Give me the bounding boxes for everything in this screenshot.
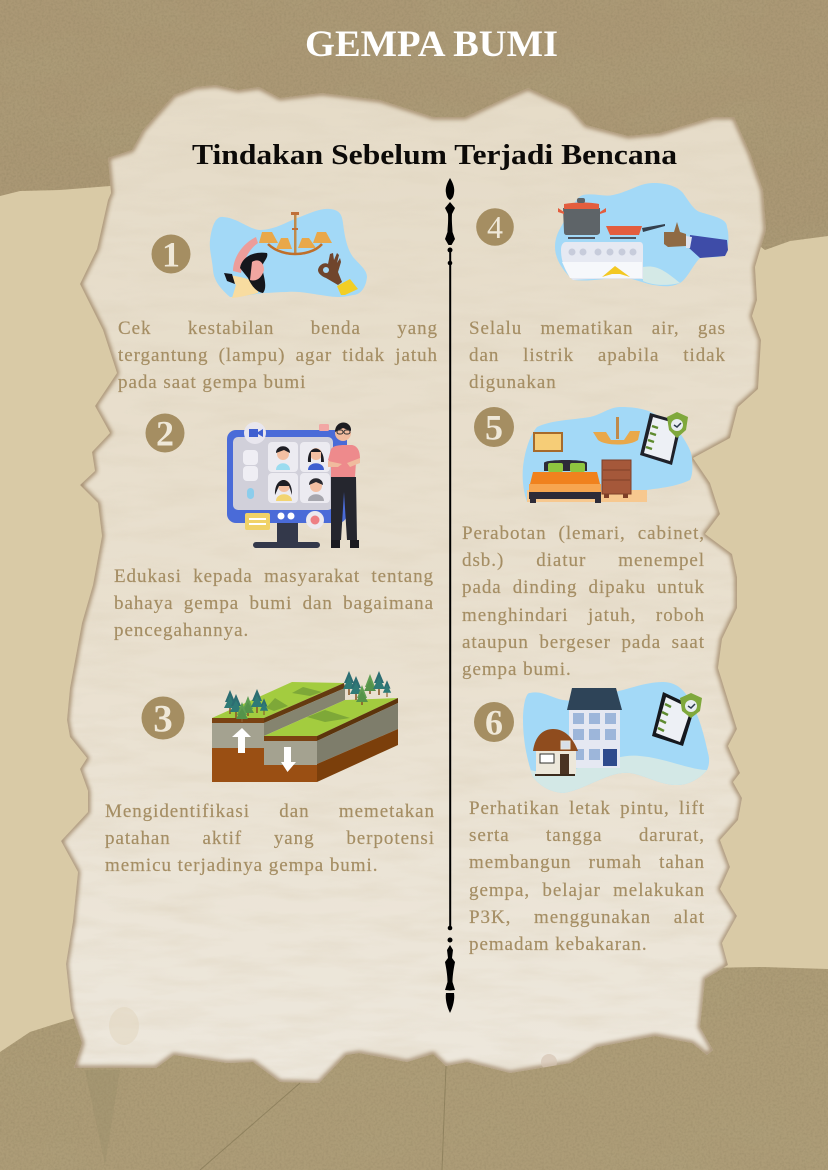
section heading: Tindakan Sebelum Terjadi Bencana: [192, 139, 678, 171]
badge 6: [474, 702, 514, 742]
badge 6: 6: [485, 702, 503, 742]
illustration 4: stove: [555, 183, 728, 286]
badge 4: 4: [487, 209, 503, 245]
text 5: [462, 523, 705, 680]
badge 4: [476, 208, 514, 246]
text 5: ataupun bergeser pada saat: [462, 632, 705, 653]
kraft top: [0, 0, 828, 260]
text 5: gempa bumi.: [462, 659, 572, 680]
text 2: Edukasi kepada masyarakat tentang: [114, 566, 434, 587]
text 1: pada saat gempa bumi: [118, 372, 306, 393]
text 6: P3K, menggunakan alat: [469, 907, 705, 928]
text 3: Mengidentifikasi dan memetakan: [105, 801, 435, 822]
illustration 2: online education: [227, 422, 360, 548]
badge 5: 5: [485, 408, 503, 448]
text 6: gempa, belajar melakukan: [469, 880, 705, 901]
badge 1: [152, 234, 190, 274]
badge 1: 1: [162, 234, 180, 274]
illustration 1: chandelier check: [210, 208, 367, 298]
title: GEMPA BUMI: [305, 24, 558, 65]
text 2: pencegahannya.: [114, 620, 249, 641]
text 6: serta tangga darurat,: [469, 825, 705, 846]
text 1: [118, 318, 438, 393]
text 4: Selalu mematikan air, gas: [469, 318, 726, 339]
text 6: [469, 798, 705, 955]
text 3: [105, 801, 435, 876]
text 1: Cek kestabilan benda yang: [118, 318, 438, 339]
text 4: dan listrik apabila tidak: [469, 345, 726, 366]
text 5: pada dinding dipaku untuk: [462, 577, 705, 598]
illustration 3: fault block: [212, 671, 398, 782]
badge 3: 3: [153, 698, 173, 740]
kraft bottom: [0, 960, 828, 1170]
illustration 5: bedroom: [522, 407, 692, 503]
text 3: patahan aktif yang berpotensi: [105, 828, 435, 849]
badge 2: 2: [156, 414, 174, 454]
text 6: Perhatikan letak pintu, lift: [469, 798, 705, 819]
text 4: digunakan: [469, 372, 557, 393]
text 5: menghindari jatuh, roboh: [462, 605, 705, 626]
text 4: [469, 318, 726, 393]
badge 2: [146, 414, 184, 454]
text 3: memicu terjadinya gempa bumi.: [105, 855, 378, 876]
divider ornament: [445, 178, 455, 1013]
text 6: pemadam kebakaran.: [469, 934, 648, 955]
badge 5: [474, 407, 514, 448]
text 5: dsb.) diatur menempel: [462, 550, 705, 571]
illustration 6: buildings: [523, 682, 710, 793]
paper: [61, 85, 766, 1083]
text 5: Perabotan (lemari, cabinet,: [462, 523, 705, 544]
text 2: [114, 566, 434, 641]
text 2: bahaya gempa bumi dan bagaimana: [114, 593, 434, 614]
text 1: tergantung (lampu) agar tidak jatuh: [118, 345, 438, 366]
badge 3: [142, 696, 184, 740]
text 6: membangun rumah tahan: [469, 852, 705, 873]
